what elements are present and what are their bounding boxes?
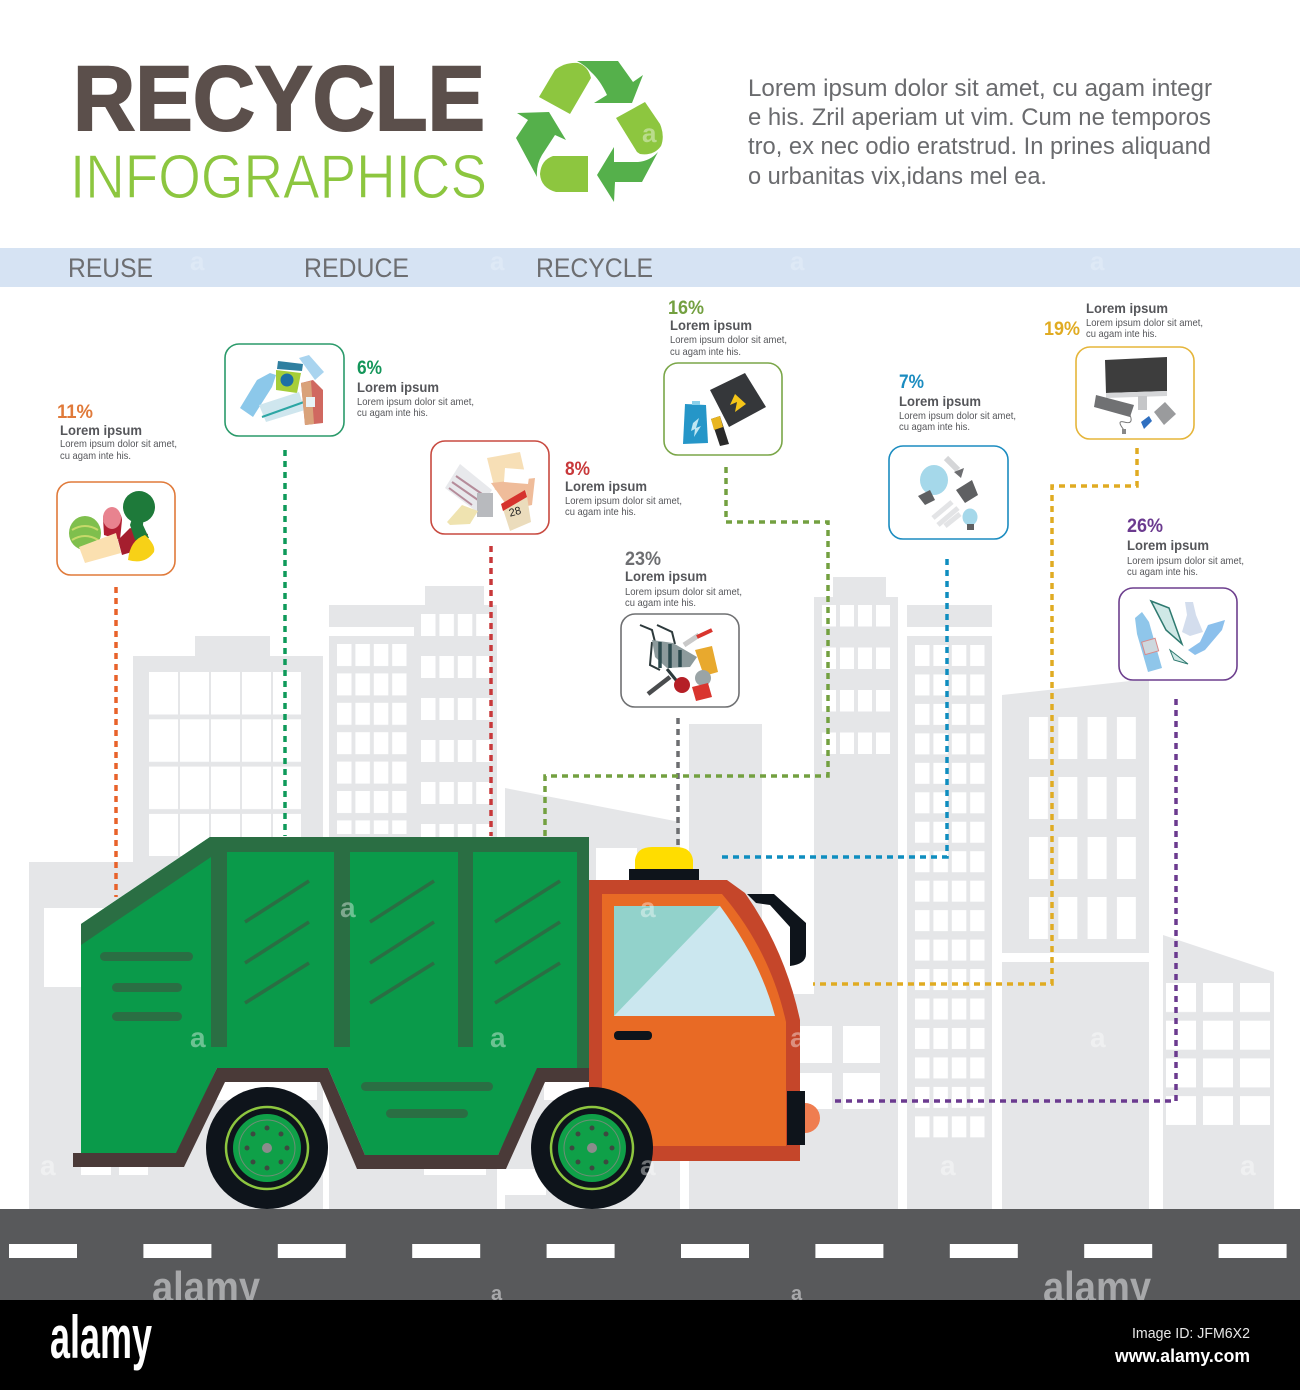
icon: batteries: [683, 373, 766, 446]
watermark letters: a: [790, 246, 805, 276]
callout: 23%: Lorem ipsum: [625, 569, 707, 584]
panel: reuse reduce recycle band: REDUCE: [304, 253, 409, 283]
dotted connector: blue: [722, 559, 947, 857]
callout: 8%: Lorem ipsum dolor sit amet,: [565, 495, 682, 507]
footer image id: Image ID: JFM6X2: [1132, 1325, 1250, 1342]
truck headlight: [790, 1103, 820, 1133]
watermark on road: alamy: [152, 1263, 260, 1312]
callout: 7%: 7%: [899, 371, 924, 393]
icon: recycle symbol: [516, 61, 663, 202]
callout: 23%: Lorem ipsum dolor sit amet,: [625, 586, 742, 598]
watermark letters: a: [640, 1150, 656, 1181]
callout: 26%: Lorem ipsum dolor sit amet,: [1127, 555, 1244, 567]
watermark letters: a: [1090, 1022, 1106, 1053]
callout: 16%: [664, 297, 787, 455]
callout: 11%: 11%: [57, 401, 93, 423]
footer logo: alamy: [50, 1304, 152, 1371]
callout: 6%: 6%: [357, 357, 382, 379]
icon: scrap tools and wheelbarrow: [640, 625, 718, 701]
footer url: www.alamy.com: [1114, 1346, 1250, 1366]
dotted connector: yellow: [813, 448, 1137, 984]
dotted connector: green: [283, 450, 287, 836]
callout: 16%: cu agam inte his.: [670, 346, 741, 358]
callout: 8%: Lorem ipsum: [565, 479, 647, 494]
watermark letters: a: [1090, 246, 1105, 276]
callout: 26%: [1119, 515, 1244, 680]
callout: 16%: Lorem ipsum dolor sit amet,: [670, 334, 787, 346]
text block: intro paragraph: [748, 75, 1212, 190]
watermark letters: a: [940, 1150, 956, 1181]
dotted connector: purple: [830, 699, 1176, 1101]
truck cab: [589, 847, 806, 1161]
rear wheel: [206, 1087, 328, 1209]
watermark letters: a: [1240, 1150, 1256, 1181]
watermark letters: a: [490, 246, 505, 276]
callout: 11%: cu agam inte his.: [60, 450, 131, 462]
icon: electronic waste: [1094, 357, 1176, 434]
panel: reuse reduce recycle band: REUSE: [68, 253, 153, 283]
text block: intro paragraph: o urbanitas vix,idans mel ea.: [748, 163, 1047, 190]
callout: 7%: cu agam inte his.: [899, 421, 970, 433]
title: Recycle Infographics: [70, 48, 487, 212]
callout: 6%: [225, 344, 474, 436]
watermark letters: a: [190, 1022, 206, 1053]
title: Recycle Infographics: RECYCLE: [73, 48, 485, 150]
panel: reuse reduce recycle band: RECYCLE: [536, 253, 653, 283]
callout: 23%: 23%: [625, 548, 661, 570]
city skyline background: [29, 577, 1274, 1209]
callout: 8%: cu agam inte his.: [565, 506, 636, 518]
watermark letters: a: [340, 892, 356, 923]
callout: 6%: Lorem ipsum dolor sit amet,: [357, 396, 474, 408]
callout: 16%: Lorem ipsum: [670, 318, 752, 333]
callout: 19%: Lorem ipsum dolor sit amet,: [1086, 317, 1203, 329]
watermark letters: a: [790, 1022, 806, 1053]
callout: 26%: cu agam inte his.: [1127, 566, 1198, 578]
watermark on road: alamy: [1043, 1263, 1151, 1312]
icon: waste paper: 28: [508, 505, 523, 520]
dotted connector: orange: [114, 587, 118, 897]
callout: 6%: cu agam inte his.: [357, 407, 428, 419]
watermark on road: [152, 1263, 1151, 1312]
callout: 6%: Lorem ipsum: [357, 380, 439, 395]
footer bar: [0, 1300, 1300, 1390]
callout: 7%: [889, 371, 1016, 539]
icon: glass waste: [1135, 601, 1225, 672]
callout: 19%: Lorem ipsum: [1086, 301, 1168, 316]
icon: plastic containers: [240, 355, 324, 425]
callout: 19%: cu agam inte his.: [1086, 328, 1157, 340]
dotted connector: grey: [676, 718, 680, 846]
dotted connector: red: [489, 546, 493, 836]
callout: 19%: 19%: [1044, 318, 1080, 340]
road: [0, 1209, 1300, 1300]
callout: 16%: 16%: [668, 297, 704, 319]
callout: 7%: Lorem ipsum: [899, 394, 981, 409]
icon: waste paper: [445, 452, 535, 531]
watermark letters: a: [640, 892, 656, 923]
callout: 23%: [621, 548, 742, 707]
text block: intro paragraph: e his. Zril aperiam ut vim. Cum ne temporos: [748, 104, 1211, 131]
panel: reuse reduce recycle band: [0, 248, 1300, 287]
icon: food waste: [69, 491, 155, 563]
garbage truck: [73, 837, 820, 1209]
text block: intro paragraph: tro, ex nec odio eratstrud. In prines aliquand: [748, 133, 1211, 160]
truck body: [81, 837, 589, 1155]
text block: intro paragraph: Lorem ipsum dolor sit amet, cu agam integr: [748, 75, 1212, 102]
truck chassis: [73, 1068, 589, 1169]
callout: 11%: [57, 401, 177, 575]
callout: 19%: [1044, 301, 1203, 439]
watermark letters: a: [190, 246, 205, 276]
dotted connector: olive: [545, 467, 828, 836]
watermark on road: a: [491, 1283, 503, 1305]
callout: 23%: cu agam inte his.: [625, 597, 696, 609]
callout: 8%: 8%: [565, 458, 590, 480]
watermark on road: a: [791, 1283, 803, 1305]
callout: 8%: [431, 441, 682, 534]
callout: 26%: 26%: [1127, 515, 1163, 537]
callout: 11%: Lorem ipsum: [60, 423, 142, 438]
callout: 11%: Lorem ipsum dolor sit amet,: [60, 438, 177, 450]
callout: 26%: Lorem ipsum: [1127, 538, 1209, 553]
front wheel: [531, 1087, 653, 1209]
watermark letters: [40, 118, 1256, 1181]
callout: 7%: Lorem ipsum dolor sit amet,: [899, 410, 1016, 422]
watermark letters: a: [490, 1022, 506, 1053]
watermark letters: a: [40, 1150, 56, 1181]
icon: light bulbs: [918, 458, 978, 530]
watermark letters: a: [642, 118, 657, 148]
title: Recycle Infographics: INFOGRAPHICS: [70, 143, 487, 212]
